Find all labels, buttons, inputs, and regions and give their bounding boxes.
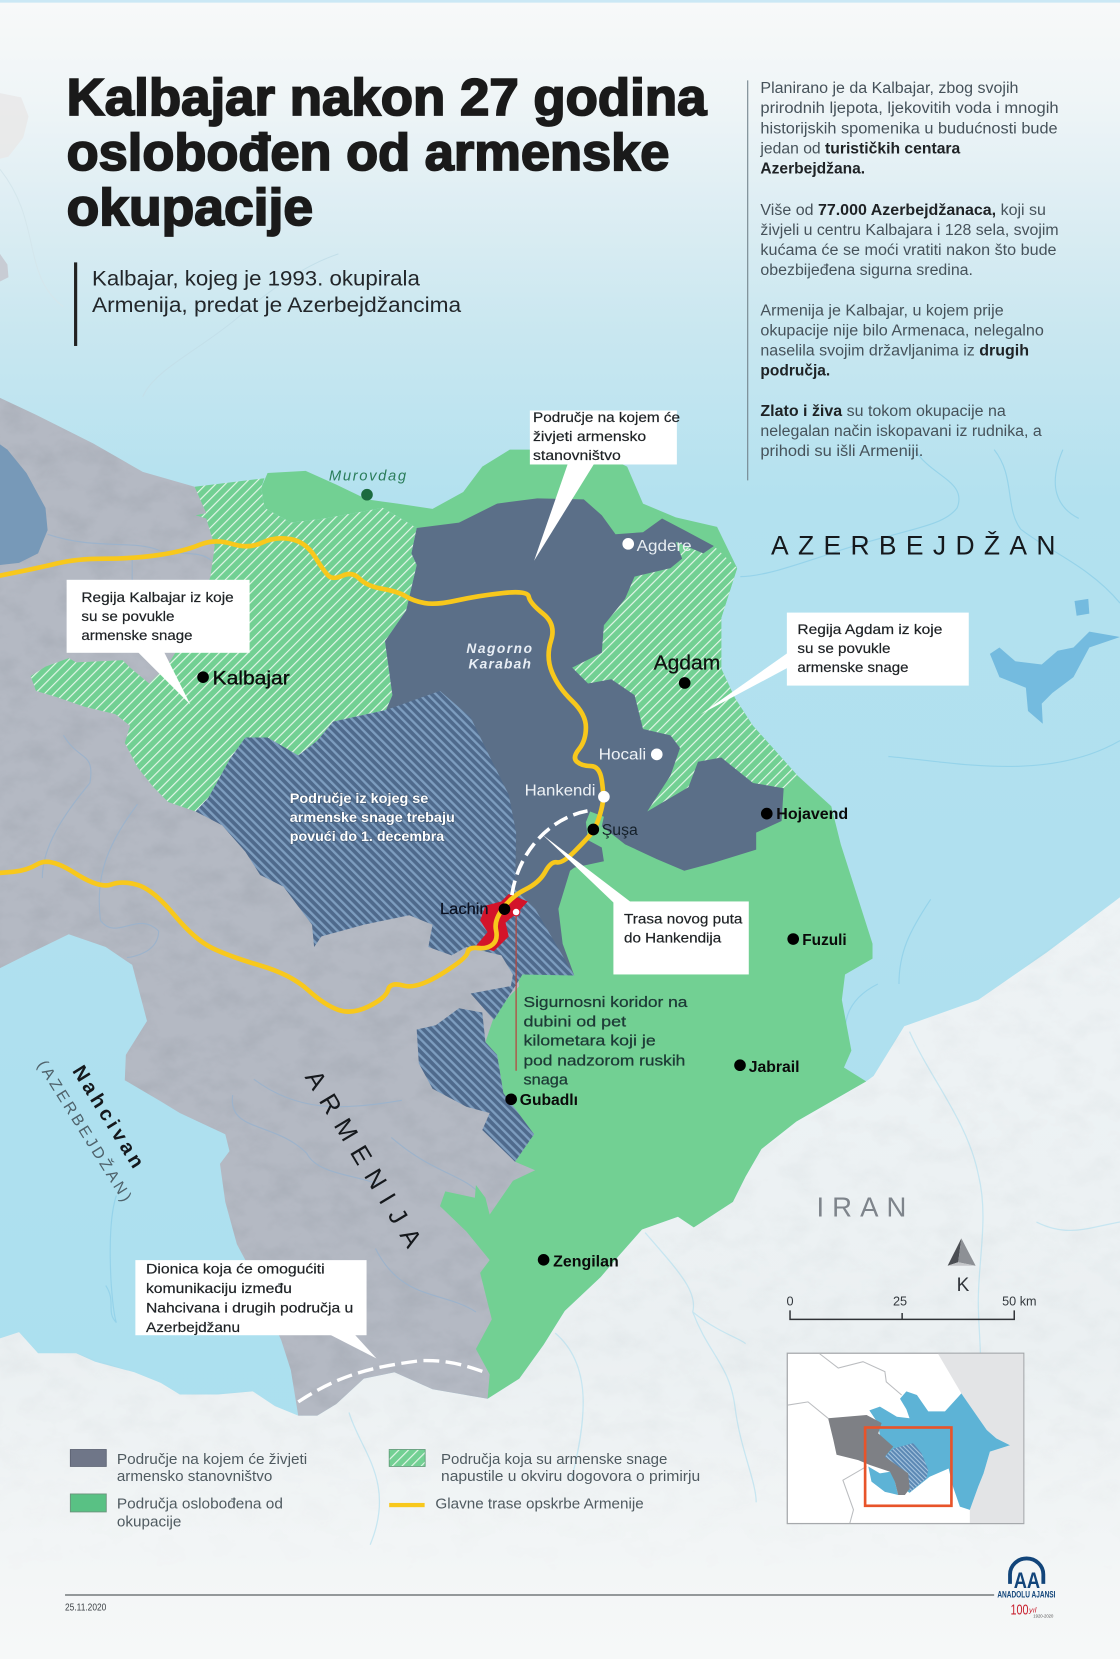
logo: Anadolu Ajansi 100 years: ANADOLU AJANSI [997,1590,1055,1600]
city: Jabrail: Jabrail [749,1059,800,1076]
rivers on Azerbaijan and Iran [106,450,1120,1323]
paragraph: gold and mercury: prihodi su išli Armeniji. [760,443,923,460]
label: Nahcivan: Nahcivan [68,1062,148,1172]
region: Armenia [0,398,550,1416]
paragraph: tourism: prirodnih ljepota, ljekovitih voda i mnogih [760,100,1059,117]
inset: Nakhchivan [868,1466,898,1495]
callout: Agdam region: su se povukle [797,641,891,657]
scale bar: 50 km [1002,1295,1037,1309]
text: security corridor note [524,995,688,1088]
subtitle with side bar [74,262,461,346]
region: hatched area withdrawal by 1 December [196,691,574,1020]
icon: north arrow [948,1238,976,1296]
paragraph: settlement: područja. [760,363,830,380]
paragraph: tourism: Azerbejdžana. [760,161,865,178]
city: Kalbajar: Kalbajar [213,669,291,690]
inset: borders [788,1354,902,1523]
callout: Agdam region: armenske snage [797,660,909,676]
city: Hojavend: Hojavend [776,806,848,823]
paragraph: settlement: okupacije nije bilo Armenaca, nelegalno [760,322,1044,339]
text: area withdrawal by 1 December: Područje iz kojeg se [290,791,428,807]
country label: Armenia: ARMENIJA [299,1066,427,1252]
paragraph: tourism: historijskih spomenika u budućnosti bude [760,120,1058,137]
rivers in Armenia [42,534,481,1312]
paragraph: return of residents [760,202,1059,279]
legend item: hatched withdrawal areas: napustile u okviru dogovora o primirju [441,1469,700,1485]
legend item: liberated areas: Područja oslobođena od [117,1497,283,1513]
country label: Azerbejdzan: AZERBEJDŽAN [771,530,1055,560]
text: area withdrawal by 1 December [290,791,455,845]
paragraph: settlement: naselila svojim državljanima iz drugih [760,342,1029,360]
paragraph: return of residents: obezbijeđena sigurna sredina. [760,262,973,279]
title: oslobođen od armenske [67,123,669,181]
logo: Anadolu Ajansi 100 years [997,1558,1055,1619]
label: Azerbejdzan in brackets: (AZERBEJDŽAN) [34,1057,136,1205]
paragraph: gold and mercury [760,403,1042,460]
text: security corridor note: Sigurnosni koridor na [524,995,688,1011]
text: area withdrawal by 1 December: armenske snage trebaju [290,810,455,826]
faint terrain ghosts at upper left [0,93,338,397]
legend item: armenian population: Područje na kojem će živjeti [117,1452,307,1468]
paragraph: gold and mercury: Zlato i živa su tokom okupacije na [760,403,1006,420]
logo: Anadolu Ajansi 100 years: 1920-2020 [1033,1614,1054,1619]
place labels: cities [197,538,848,1270]
inset: Caspian sea [938,1354,1023,1523]
city: Lachin [440,901,510,918]
legend item: liberated areas: okupacije [117,1515,181,1531]
title [67,68,708,236]
footer rule [65,1594,994,1596]
paragraph: tourism [759,80,1059,178]
city: Agdam [654,653,720,689]
legend item: armenian population: armensko stanovništvo [117,1469,272,1485]
rivers on Iran [349,1032,1120,1545]
text: security corridor note: snaga [524,1072,569,1088]
scale bar: 0 [786,1295,794,1309]
logo: Anadolu Ajansi 100 years: 100 [1011,1603,1029,1619]
callout: Nakhchivan section: Azerbejdžanu [146,1320,240,1336]
paragraph: settlement: Armenija je Kalbajar, u kojem prije [760,302,1004,319]
text: area withdrawal by 1 December: povući do 1. decembra [290,829,445,845]
city: Hocali: Hocali [599,747,646,764]
lake: Sevan [0,444,48,565]
icon: north arrow: K [957,1275,970,1296]
city: Agdam: Agdam [654,653,720,675]
legend item: main supply routes: Glavne trase opskrbe Armenije [435,1497,644,1513]
paragraph: return of residents: kućama će se moći vratiti nakon što bude [760,242,1057,259]
lake in Azerbaijan [990,599,1120,724]
date: 25.11.2020 [65,1602,107,1613]
corridor white marker [512,908,520,916]
city: Susa [587,822,638,839]
title: okupacije [67,178,313,236]
Nagorno Karabah label: Karabah [469,657,531,672]
callout: Nakhchivan section: komunikaciju između [146,1281,292,1297]
city: Fuzuli: Fuzuli [802,932,847,949]
legend [70,1450,700,1531]
Nagorno Karabah label [466,641,532,672]
callout: new road route: do Hankendija [624,931,721,947]
city: Zengilan: Zengilan [553,1253,619,1270]
callout: Nakhchivan section: Nahcivana i drugih područja u [146,1300,353,1316]
paragraph: return of residents: Više od 77.000 Azerbejdžanaca, koji su [760,202,1046,219]
region: Agdam hatched withdrawal area [572,546,797,812]
Lachin corridor in red [476,894,528,951]
paragraph: tourism: Planirano je da Kalbajar, zbog svojih [760,80,1018,97]
region: Nagorno Karabakh armenian population area [385,498,784,976]
inset: Azerbaijan [869,1391,1010,1510]
terrain relief texture [32,458,470,1303]
title: Kalbajar nakon 27 godina [67,68,708,126]
region: liberated areas (green) [261,450,873,1399]
scale bar: 25 [893,1295,907,1309]
callout: Kalbajar region [67,580,250,705]
legend item: hatched withdrawal areas [389,1450,700,1485]
legend item: hatched withdrawal areas: Područja koja su armenske snage [441,1452,667,1468]
callout: area for Armenian population [530,410,680,561]
subtitle with side bar: Kalbajar, kojeg je 1993. okupirala [92,268,420,291]
region: Iran and south terrain [0,897,1120,1659]
callout: Kalbajar region: armenske snage [81,628,193,644]
text: security corridor note: dubini od pet [524,1014,626,1030]
subtitle with side bar: Armenija, predat je Azerbejdžancima [92,294,461,317]
paragraph: tourism: jedan od turističkih centara [759,140,961,157]
callout: new road route: Trasa novog puta [624,912,743,928]
text: security corridor note: kilometara koji je [524,1033,656,1049]
callout: Agdam region: Regija Agdam iz koje [797,622,942,638]
inset: extent rectangle [865,1428,951,1506]
dashed route: new road to Hankendi [512,810,590,895]
supply routes in yellow [0,538,603,1012]
callout: Kalbajar region: su se povukle [81,609,175,625]
callout: Nakhchivan section: Dionica koja će omogućiti [146,1261,325,1277]
inset locator map [787,1353,1024,1524]
dashed route: Nakhchivan link [298,1361,488,1402]
city: Hankendi [525,783,610,803]
logo: Anadolu Ajansi 100 years: AA [1014,1568,1040,1593]
Murovdag label and dot: Murovdag [329,468,407,484]
callout: area for Armenian population: stanovništvo [533,448,621,464]
scale bar [786,1295,1037,1319]
city: Gubadli: Gubadlı [520,1092,578,1109]
legend item: liberated areas [70,1494,283,1531]
paragraph: return of residents: živjeli u centru Kalbajara i 128 sela, svojim [760,222,1059,239]
city: Agdere: Agdere [637,538,692,555]
legend item: armenian population [70,1450,307,1485]
callout: area for Armenian population: Područje na kojem će [533,410,680,426]
logo: Anadolu Ajansi 100 years: yıl [1028,1605,1037,1614]
paragraph: gold and mercury: nelegalan način iskopavani iz rudnika, a [760,423,1042,440]
inset: Karabakh area [885,1443,928,1492]
city: Susa: Şuşa [602,822,638,839]
callout: new road route [543,835,749,974]
city: Hankendi: Hankendi [525,783,595,800]
country label: Iran: IRAN [816,1192,906,1223]
right column body text [748,80,1059,480]
callout: Nakhchivan section [135,1260,377,1359]
callout: Kalbajar region: Regija Kalbajar iz koje [81,590,234,606]
Murovdag label and dot [329,468,407,501]
paragraph: settlement [760,302,1044,380]
inset: Armenia [828,1415,910,1495]
region: Kalbajar hatched withdrawal area [31,478,417,812]
city: Hocali [599,747,663,764]
city: Lachin: Lachin [440,901,489,918]
text: security corridor note: pod nadzorom ruskih [524,1053,685,1069]
Nagorno Karabah label: Nagorno [466,641,532,656]
leader line: security corridor [515,911,517,1071]
callout: area for Armenian population: živjeti armensko [533,429,646,445]
callout: Agdam region [701,613,969,714]
region: Gubadli hatched area [417,1008,534,1162]
